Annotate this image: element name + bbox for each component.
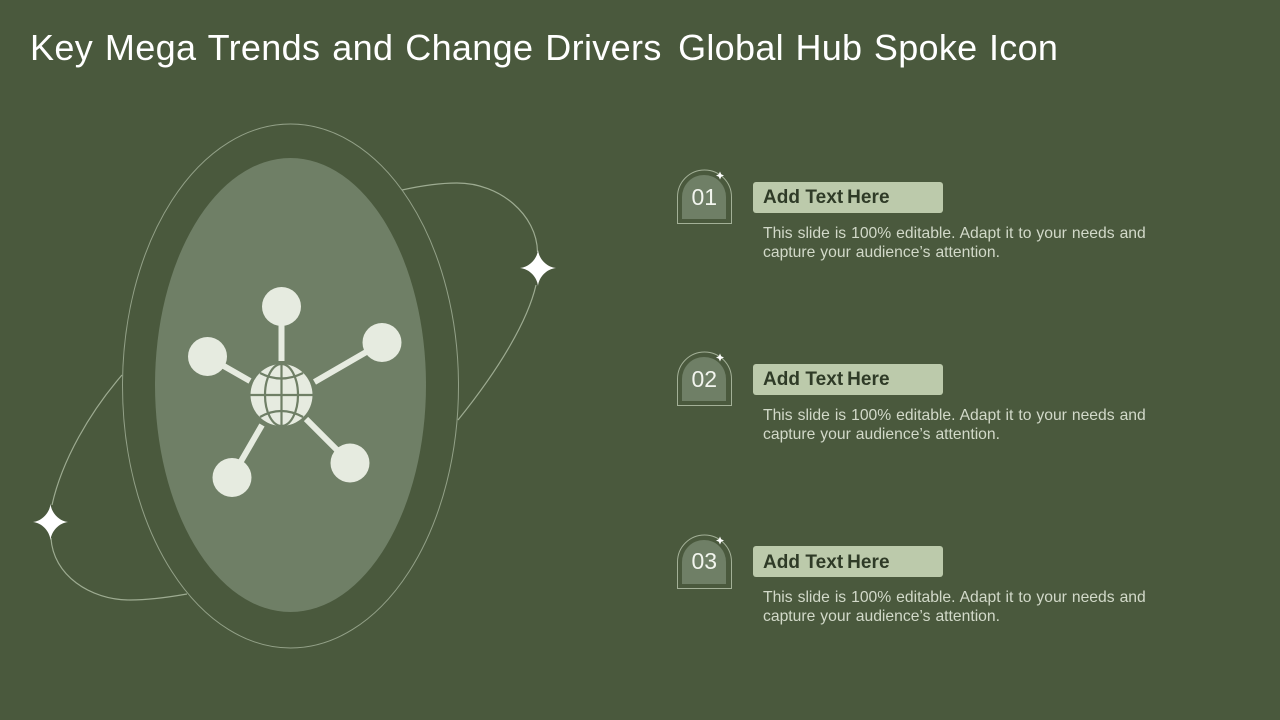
badge 03 xyxy=(677,534,732,589)
description 02: This slide is 100% editable. Adapt it to your needs and xyxy=(763,407,1146,424)
item 03 xyxy=(677,534,1146,625)
icon: global hub spoke xyxy=(188,287,402,497)
badge 03: 03 xyxy=(692,548,717,574)
spokes xyxy=(222,320,368,463)
description 01: This slide is 100% editable. Adapt it to your needs and xyxy=(763,225,1146,242)
spoke nodes xyxy=(188,287,402,497)
description 02 xyxy=(763,407,1146,443)
badge 02: 02 xyxy=(692,366,717,392)
diagram: global hub and spoke in orbit xyxy=(33,124,556,648)
description 03: This slide is 100% editable. Adapt it to your needs and xyxy=(763,589,1146,606)
label bar 03 xyxy=(753,546,943,577)
label bar 03: Add Text Here xyxy=(763,552,890,573)
badge 01 xyxy=(677,170,732,224)
label bar 01: Add Text Here xyxy=(763,187,890,208)
item 01 xyxy=(677,170,1146,261)
orbit curve: lower left xyxy=(51,375,187,600)
description 03: capture your audience’s attention. xyxy=(763,608,1000,625)
label bar 02 xyxy=(753,364,943,395)
title: Key Mega Trends and Change Drivers Global Hub Spoke Icon xyxy=(30,27,1058,68)
outer ellipse outline xyxy=(122,124,458,648)
globe xyxy=(250,364,312,426)
description 02: capture your audience’s attention. xyxy=(763,426,1000,443)
star: upper right xyxy=(520,250,556,286)
star: lower left xyxy=(33,504,68,540)
badge 02 xyxy=(677,352,732,406)
description 01: capture your audience’s attention. xyxy=(763,244,1000,261)
orbit curve: upper right xyxy=(402,183,538,420)
description 01 xyxy=(763,225,1146,261)
badge 01: 01 xyxy=(692,184,717,210)
label bar 01 xyxy=(753,182,943,213)
inner ellipse xyxy=(155,158,426,612)
description 03 xyxy=(763,589,1146,625)
item 02 xyxy=(677,352,1146,443)
label bar 02: Add Text Here xyxy=(763,369,890,390)
